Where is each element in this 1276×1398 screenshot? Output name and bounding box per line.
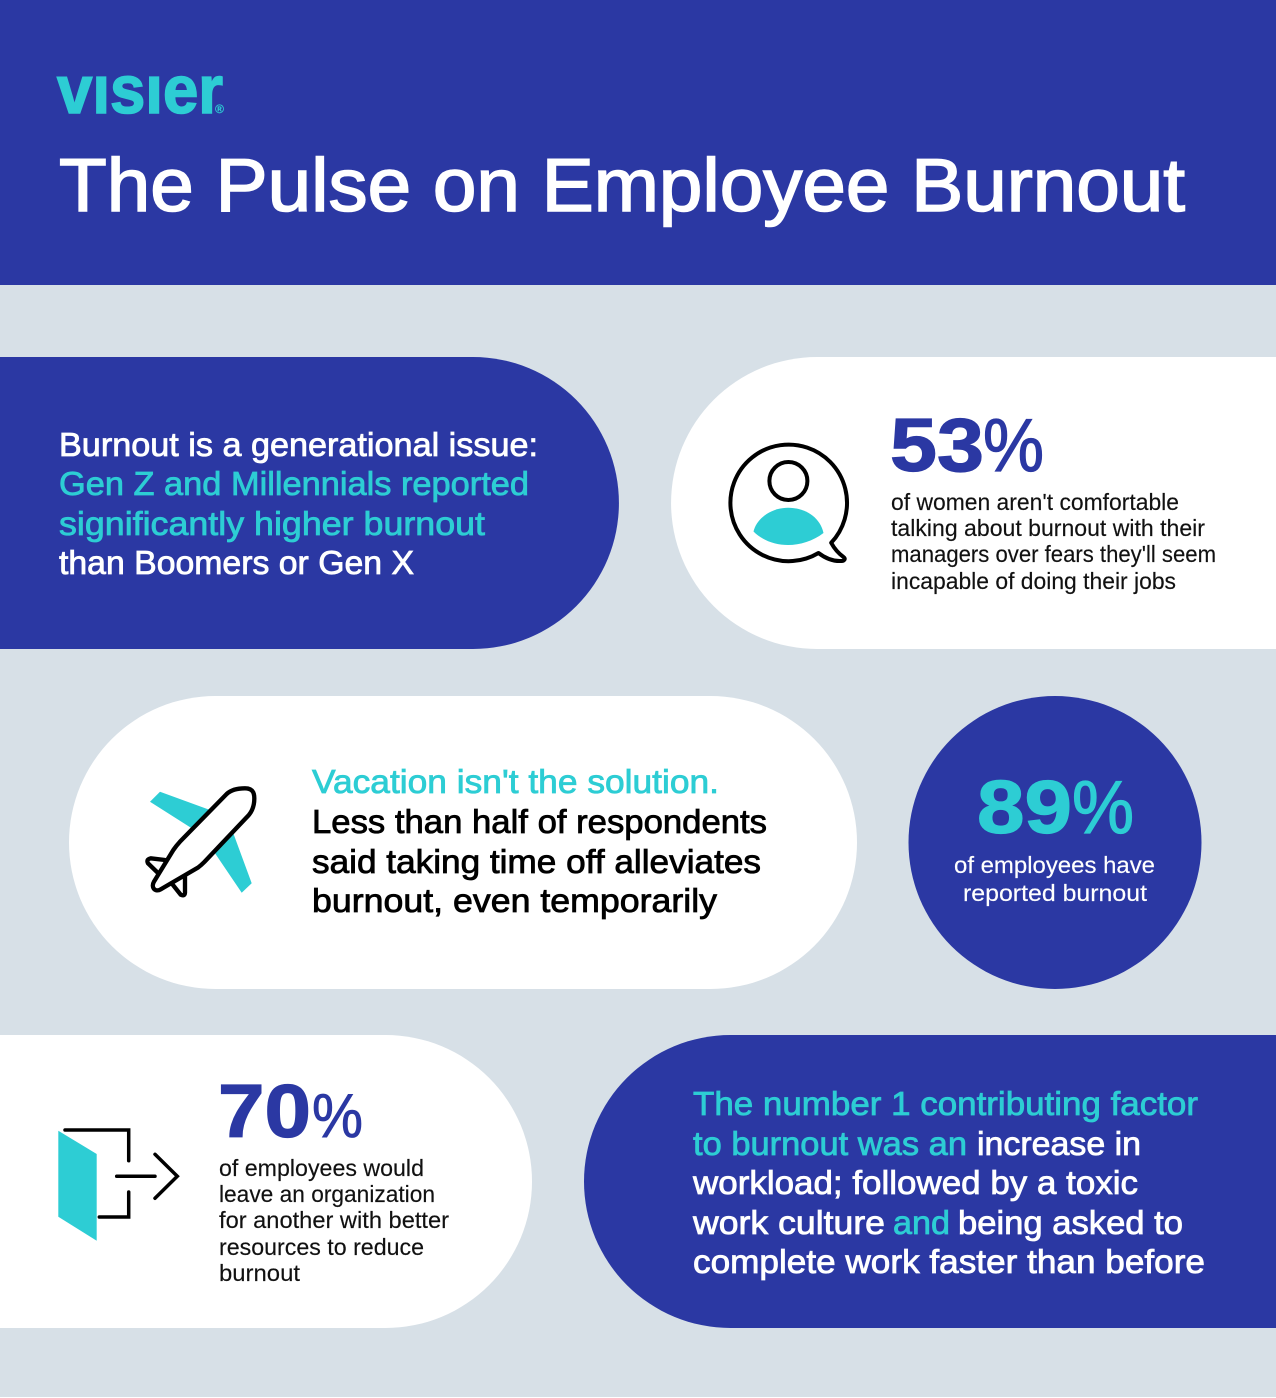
panel: 53% of women (671, 357, 1276, 649)
text block: reported burnout: reported burnout (963, 880, 1148, 906)
text block: better resources: for another with better (219, 1207, 449, 1233)
text block: vacation: burnout, even temporarily (312, 883, 717, 920)
text block: contributing factors: increase in (977, 1126, 1141, 1163)
icon: door with exit arrow (58, 1130, 177, 1241)
icon: airplane (147, 788, 254, 895)
text block: generational issue: than Boomers or Gen X (59, 545, 414, 582)
stat: 89%: 89 (977, 765, 1072, 849)
panel: contributing factors (584, 1035, 1276, 1328)
text block: vacation: Less than half of respondents (312, 804, 767, 841)
stat: 89% (977, 765, 1134, 849)
text block: generational issue: significantly higher burnout (59, 506, 486, 543)
text block: better resources: burnout (219, 1260, 301, 1286)
text block: reported burnout: of employees have (954, 852, 1155, 878)
text block: vacation: Vacation isn't the solution. (312, 764, 719, 801)
text block: better resources: of employees would (219, 1155, 424, 1181)
stat: 70% (218, 1069, 363, 1153)
panel: vacation (69, 696, 857, 989)
text block: contributing factors: workload; followed by a toxic (692, 1165, 1138, 1202)
text block: reported burnout (954, 852, 1155, 906)
text block: contributing factors: and (893, 1205, 950, 1242)
text block: contributing factors: The number 1 contributing factor (693, 1086, 1198, 1123)
header banner (0, 0, 1276, 285)
text block: generational issue: Burnout is a generational issue: (59, 427, 538, 464)
logo: visier: ® (215, 102, 224, 116)
stat: 53%: 53 (890, 403, 984, 487)
text block: generational issue (59, 427, 538, 582)
stat: 53% (890, 403, 1044, 487)
text block: generational issue: Gen Z and Millennials reported (59, 466, 529, 503)
text block: better resources: leave an organization (219, 1181, 435, 1207)
stat: 53%: % (983, 403, 1044, 487)
text block: better resources: resources to reduce (219, 1234, 424, 1260)
panel: 70% would leave (0, 1035, 532, 1328)
stat: 89%: % (1072, 765, 1134, 849)
text block: women and managers: talking about burnout with their (891, 515, 1205, 541)
text block: contributing factors: being asked to (958, 1205, 1183, 1242)
text block: women and managers: managers over fears they'll seem (891, 541, 1216, 567)
text block: contributing factors: work culture (692, 1205, 885, 1242)
text block: vacation: said taking time off alleviates (312, 844, 761, 881)
text block: contributing factors: complete work faster than before (693, 1244, 1205, 1281)
text block: women and managers: of women aren't comfortable (891, 489, 1179, 515)
logo: visier: vısıer (57, 52, 223, 128)
text block: women and managers: incapable of doing their jobs (891, 568, 1176, 594)
stat: 70%: % (312, 1082, 363, 1151)
panel: 89% of employees (908, 696, 1202, 989)
panel: generational issue (0, 357, 619, 649)
text block: women and managers (891, 489, 1216, 594)
text block: contributing factors (692, 1086, 1205, 1281)
text block: better resources (219, 1155, 449, 1286)
title: The Pulse on Employee Burnout (59, 143, 1185, 227)
icon: person in speech bubble (730, 445, 847, 561)
stat: 70%: 70 (218, 1069, 311, 1153)
text block: vacation (312, 764, 767, 920)
text block: contributing factors: to burnout was an (693, 1126, 967, 1163)
